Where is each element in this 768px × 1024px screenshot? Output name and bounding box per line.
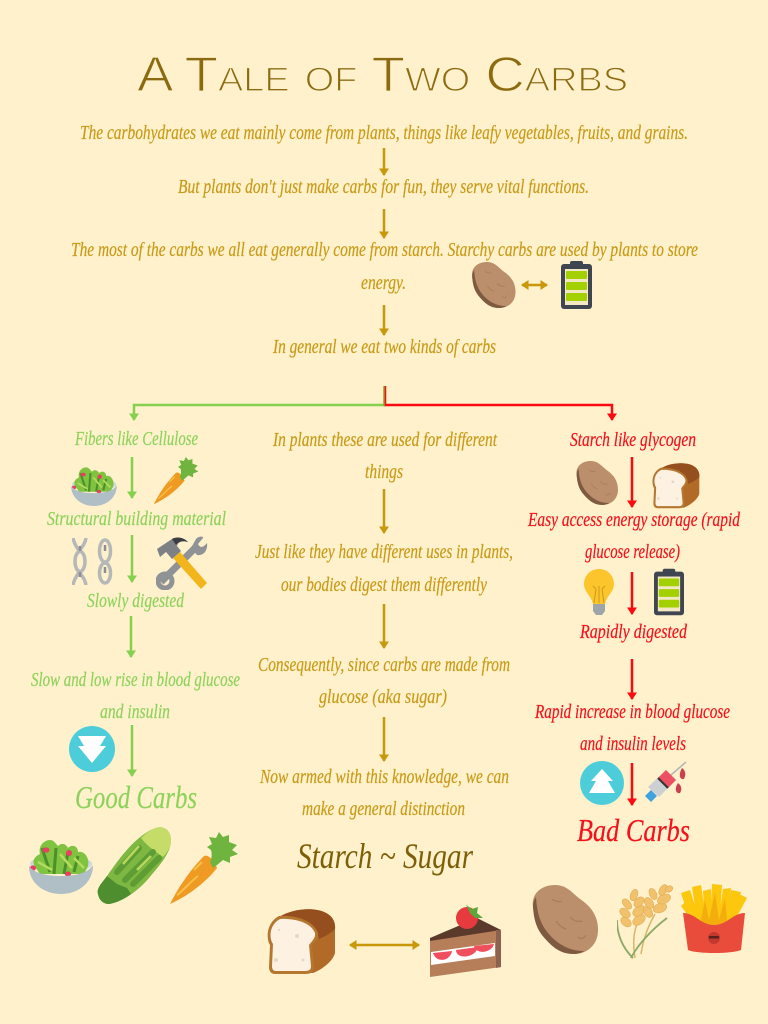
text: made from glucose	[258, 654, 510, 708]
label: slow rise: Slow and low rise in blood glucose	[31, 669, 240, 691]
intro text: two kinds of carbs: In general we eat two kinds of carbs	[272, 336, 496, 358]
arrow	[383, 604, 385, 648]
icon: potato	[576, 461, 618, 505]
label: energy storage: glucose release)	[585, 541, 680, 563]
branch connector: green	[134, 405, 385, 420]
arrow	[131, 725, 133, 776]
double arrow: potato to battery	[522, 284, 547, 286]
label: starch: Starch like glycogen	[570, 429, 696, 451]
icon: tools	[157, 537, 207, 589]
arrow	[631, 763, 633, 805]
label: energy storage	[527, 509, 741, 563]
arrow	[631, 659, 633, 699]
icon: battery	[561, 261, 592, 309]
icon: battery	[654, 569, 684, 615]
text: different things	[272, 429, 497, 483]
icon: potato	[472, 262, 516, 308]
text: made from glucose: Consequently, since carbs are made from	[258, 654, 510, 676]
arrow	[383, 209, 385, 238]
intro text: starch: energy.	[361, 272, 406, 294]
branch stem	[383, 386, 385, 406]
icon: salad	[71, 467, 117, 506]
intro text: plants' functions: But plants don't just make carbs for fun, they serve vital functions.	[178, 176, 589, 198]
heading: good carbs: Good Carbs	[75, 779, 197, 815]
title: A Tale of Two Carbs	[137, 48, 628, 102]
icon: light bulb	[584, 569, 614, 615]
branch connector: red	[385, 386, 612, 420]
icon: salad large	[29, 840, 93, 894]
text: different things: In plants these are used for different	[272, 429, 497, 451]
intro text: starch	[71, 239, 698, 294]
arrow	[631, 457, 633, 507]
double arrow: bread to cake	[350, 944, 419, 946]
arrow	[383, 489, 385, 533]
text: made from glucose: glucose (aka sugar)	[319, 686, 447, 708]
arrow	[130, 616, 132, 657]
label: fibers: Fibers like Cellulose	[74, 428, 198, 450]
arrow	[383, 305, 385, 335]
text: digest differently: Just like they have different uses in plants,	[255, 541, 513, 563]
arrow	[131, 535, 133, 582]
icon: bread	[268, 909, 335, 974]
arrow	[383, 148, 385, 175]
label: structural: Structural building material	[47, 508, 226, 530]
panel: bad carbs column	[527, 429, 747, 958]
icon: syringe	[645, 762, 686, 802]
icon: down arrows circle	[69, 726, 115, 772]
label: slow rise	[31, 669, 240, 723]
text: general distinction	[259, 766, 509, 820]
text: general distinction: Now armed with this knowledge, we can	[259, 766, 509, 788]
heading: bad carbs: Bad Carbs	[577, 812, 690, 848]
icon: carrot	[154, 457, 198, 504]
panel: good carbs column	[29, 428, 240, 904]
icon: bread	[652, 463, 699, 508]
icon: fries	[681, 884, 747, 953]
label: slow rise: and insulin	[100, 701, 170, 723]
text: general distinction: make a general distinction	[302, 798, 465, 820]
arrow	[631, 572, 633, 614]
icon: cucumber	[98, 827, 171, 904]
text: different things: things	[365, 461, 403, 483]
text: digest differently	[255, 541, 513, 596]
icon: up arrows circle	[580, 761, 624, 805]
label: rapid increase	[534, 701, 730, 755]
arrow	[131, 457, 133, 498]
icon: cake	[430, 905, 501, 977]
icon: potato large	[533, 885, 598, 954]
icon: wheat	[617, 883, 674, 958]
label: rapid increase: and insulin levels	[580, 733, 686, 755]
arrow	[383, 717, 385, 761]
heading: starch sugar: Starch ~ Sugar	[297, 836, 474, 876]
text: digest differently: our bodies digest them differently	[281, 574, 487, 596]
label: rapidly digested: Rapidly digested	[579, 621, 688, 643]
panel: middle column	[255, 429, 513, 977]
icon: carrot large	[170, 832, 238, 904]
label: slowly digested: Slowly digested	[87, 590, 185, 612]
icon: chains	[73, 538, 110, 585]
